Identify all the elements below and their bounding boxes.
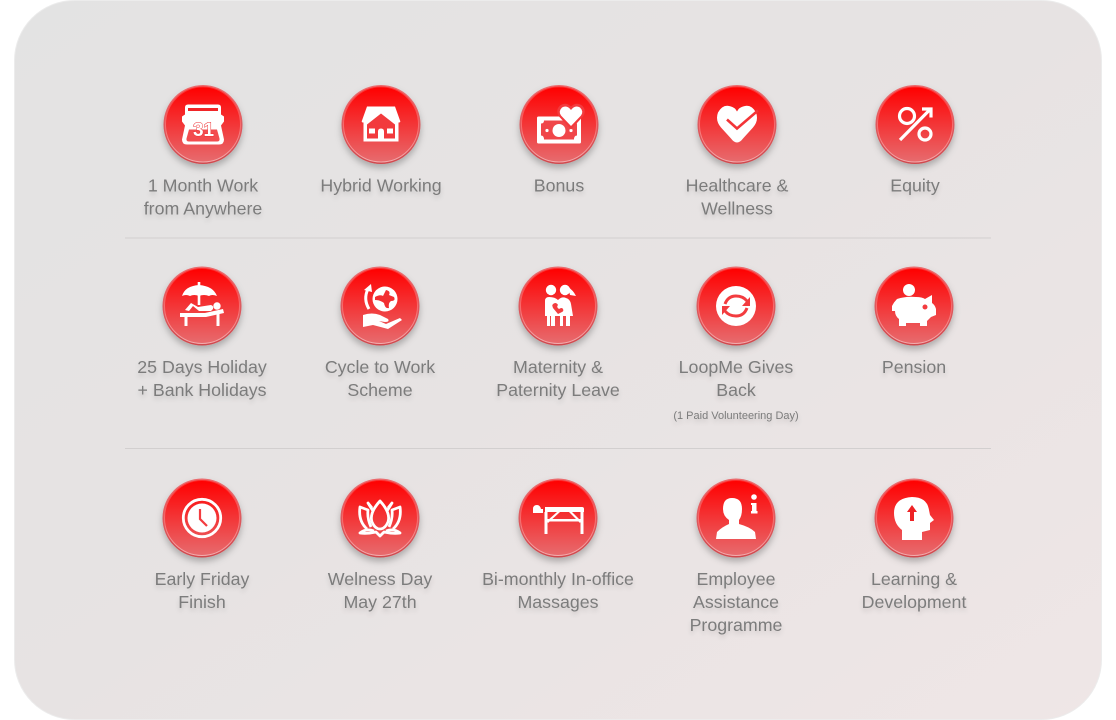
benefit: Bi-monthly In-office Massages (482, 478, 634, 612)
icon: piggy bank (892, 284, 936, 326)
label: Scheme (347, 380, 413, 400)
label: May 27th (343, 592, 417, 612)
benefit: Bonus (520, 85, 598, 196)
label (137, 357, 267, 400)
benefit: Early Friday Finish (155, 478, 250, 612)
icon: head with up arrow (894, 497, 934, 540)
label: Equity (890, 176, 940, 196)
label: Assistance (693, 592, 779, 612)
benefit: Employee Assistance Programme (690, 478, 783, 635)
benefit: Welness Day May 27th (328, 478, 432, 612)
icon: globe in hand with arrow (363, 284, 402, 329)
divider (125, 238, 991, 239)
label: Healthcare & (686, 176, 789, 196)
label: Early Friday (155, 569, 250, 589)
benefit: Pension (874, 266, 954, 377)
label: + Bank Holidays (138, 380, 267, 400)
label: Cycle to Work (325, 357, 435, 377)
label (155, 569, 250, 612)
benefit: Learning & Development (862, 478, 966, 612)
label (686, 176, 789, 218)
icon: sun lounger with umbrella (180, 282, 224, 326)
label: Pension (882, 357, 946, 377)
label: LoopMe Gives (679, 357, 793, 377)
label: Welness Day (328, 569, 432, 589)
icon: clock (183, 499, 221, 537)
benefit: Equity (876, 85, 954, 196)
label (673, 357, 799, 422)
icon: house (362, 106, 400, 142)
label (496, 357, 620, 400)
benefit: 25 Days Holiday + Bank Holidays (137, 266, 267, 400)
benefit: Cycle to Work Scheme (325, 266, 435, 400)
label: (1 Paid Volunteering Day) (673, 410, 799, 422)
benefit: 1 Month Work from Anywhere (144, 85, 262, 218)
label (482, 569, 634, 612)
benefit: LoopMe Gives Back (673, 266, 799, 422)
label: Hybrid Working (320, 176, 442, 196)
label (144, 176, 262, 218)
icon: refresh arrows (716, 286, 756, 326)
label: Massages (517, 592, 599, 612)
icon: heart with check (717, 106, 758, 142)
label (325, 357, 435, 400)
label: Development (862, 592, 966, 612)
icon: lotus (360, 501, 400, 536)
benefit: Healthcare & Wellness (686, 85, 789, 218)
label: Bonus (534, 176, 584, 196)
label: Maternity & (513, 357, 603, 377)
icon: banknote with heart (537, 104, 585, 144)
label: Finish (178, 592, 226, 612)
label: Back (716, 380, 756, 400)
icon: parents (545, 285, 576, 326)
label: Learning & (871, 569, 957, 589)
label: Paternity Leave (496, 380, 620, 400)
icon: calendar: 31 (193, 120, 214, 141)
benefit: Maternity & Paternity Leave (496, 266, 620, 400)
divider (125, 448, 991, 449)
icon: massage table (533, 505, 584, 534)
label: Wellness (701, 198, 773, 218)
label (690, 569, 783, 635)
label (862, 569, 966, 612)
label: 1 Month Work (148, 176, 258, 196)
icon: person with info mark (716, 494, 758, 539)
label: Employee (696, 569, 776, 589)
benefit: Hybrid Working (320, 85, 442, 196)
icon: percent with arrow (900, 108, 931, 140)
label: Bi-monthly In-office (482, 569, 634, 589)
label: Programme (690, 615, 783, 635)
label (328, 569, 432, 612)
label: 25 Days Holiday (137, 357, 267, 377)
label: from Anywhere (144, 198, 262, 218)
